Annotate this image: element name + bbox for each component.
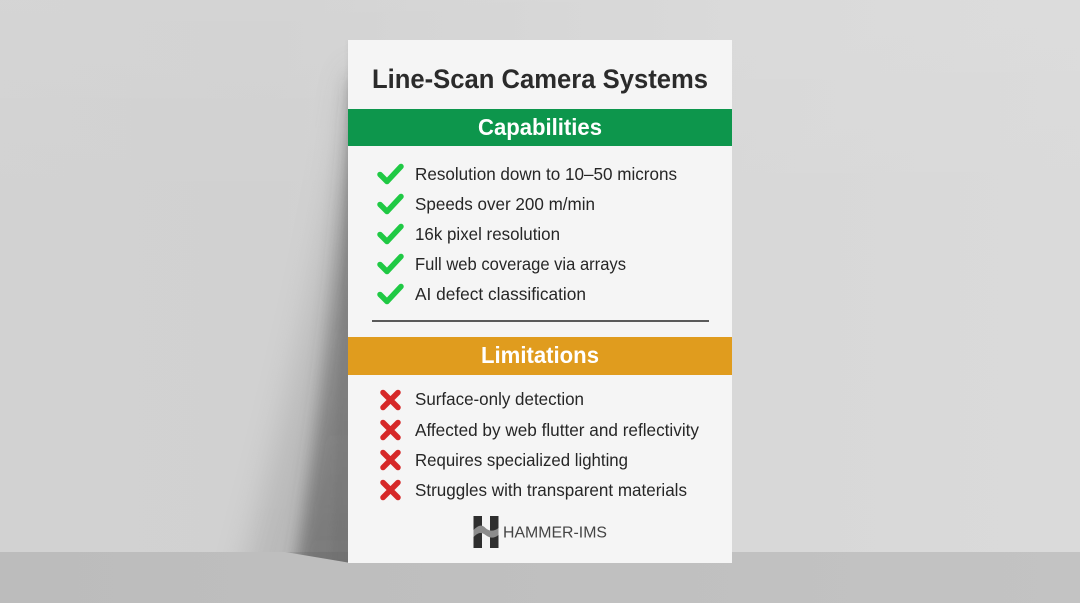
limitation: web flutter: Affected by web flutter and reflectivity: [415, 420, 699, 440]
capability: resolution: Resolution down to 10–50 microns: [415, 164, 677, 184]
logo: Hammer-IMS: [474, 516, 607, 548]
capabilities heading band: Capabilities: [478, 114, 602, 140]
panel: capabilities: [348, 109, 732, 304]
limitations heading band: Limitations: [481, 342, 599, 368]
capability: speeds: Speeds over 200 m/min: [415, 194, 595, 214]
capability: pixel resolution: 16k pixel resolution: [415, 224, 560, 244]
limitation: lighting: Requires specialized lighting: [415, 450, 628, 470]
capability: AI classification: AI defect classification: [415, 284, 586, 304]
limitations heading band: [348, 337, 732, 375]
capability: web coverage: Full web coverage via arrays: [415, 254, 626, 274]
limitation: surface-only: Surface-only detection: [415, 389, 584, 409]
poster panel: [348, 40, 732, 563]
limitation: transparent materials: Struggles with transparent materials: [415, 480, 687, 500]
icon: H mark: [474, 516, 498, 548]
logo: Hammer-IMS: HAMMER-IMS: [503, 524, 607, 542]
title: Line-Scan Camera Systems: [372, 64, 708, 94]
floor: [0, 552, 1080, 603]
cast shadow on wall: [242, 53, 348, 562]
panel: limitations: [348, 337, 732, 500]
capabilities heading band: [348, 109, 732, 146]
